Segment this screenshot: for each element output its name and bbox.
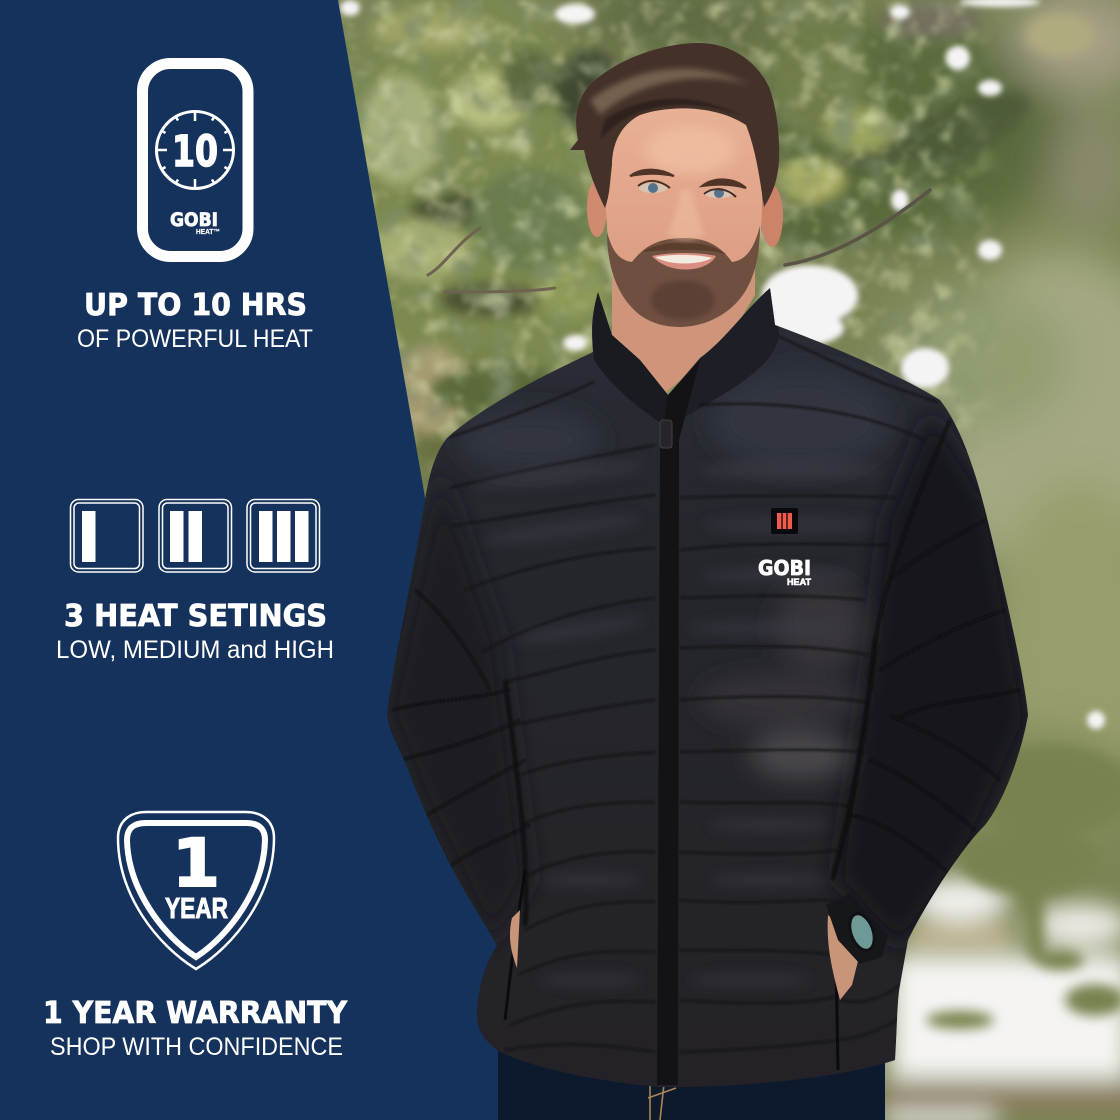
snow through tree top right bbox=[340, 0, 1105, 729]
pine needles clumps near trees bbox=[360, 2, 1095, 435]
icon: warranty shield: 1 bbox=[172, 825, 220, 902]
icon: high setting bbox=[247, 500, 320, 572]
face bbox=[605, 107, 762, 326]
subtext: of powerful heat: OF POWERFUL HEAT bbox=[77, 325, 313, 353]
moustache and chin bbox=[642, 242, 726, 254]
hair bbox=[570, 43, 779, 208]
chest seams left bbox=[450, 382, 655, 1052]
sleeve seams bbox=[392, 420, 1020, 925]
snow field bbox=[880, 878, 1120, 1120]
photo background: pine trees and snow bbox=[320, 0, 1120, 1120]
eyebrows bbox=[630, 170, 746, 188]
neck bbox=[612, 250, 755, 392]
heading: up to 10 hrs: UP TO 10 HRS bbox=[84, 288, 307, 323]
lower right branches bbox=[926, 745, 1120, 1029]
person bbox=[385, 43, 1030, 1120]
heading: 1 year warranty: 1 YEAR WARRANTY bbox=[43, 996, 348, 1031]
pocket zipper left bbox=[505, 870, 525, 1020]
sleeves shading bbox=[385, 410, 1030, 950]
icon: warranty shield bbox=[118, 812, 274, 969]
hand and watch bbox=[510, 893, 888, 1000]
cheek shading bbox=[645, 126, 735, 174]
mouth bbox=[652, 253, 716, 270]
jacket GOBI HEAT logo: GOBI bbox=[758, 556, 811, 580]
subtext: low medium high: LOW, MEDIUM and HIGH bbox=[56, 636, 334, 664]
jacket GOBI HEAT logo: HEAT bbox=[787, 577, 811, 587]
icon: medium setting bbox=[159, 500, 232, 572]
icon: phone battery with clock bbox=[142, 64, 248, 256]
feature: warranty bbox=[43, 812, 348, 1061]
jacket bbox=[385, 288, 1030, 1087]
body shading bbox=[460, 370, 890, 779]
highlights on baffles bbox=[475, 456, 880, 986]
icon: phone battery with clock: HEAT™ bbox=[196, 227, 220, 236]
collar bbox=[592, 292, 672, 425]
navy panel bbox=[0, 0, 534, 1120]
icon: phone battery with clock: GOBI bbox=[170, 209, 218, 231]
zipper pull bbox=[660, 420, 672, 448]
beard bbox=[607, 226, 760, 327]
nose bbox=[668, 190, 704, 240]
chest heat button bbox=[771, 508, 798, 534]
pocket zipper right bbox=[836, 960, 838, 1070]
subtext: shop with confidence: SHOP WITH CONFIDENCE bbox=[50, 1033, 343, 1061]
icon: low setting bbox=[70, 500, 143, 572]
chest seams right bbox=[680, 336, 938, 1052]
feature: heat settings bbox=[56, 500, 334, 664]
zipper bbox=[657, 360, 700, 1085]
branches bbox=[428, 190, 930, 292]
icon: phone battery with clock: 10 bbox=[172, 127, 218, 177]
eyes bbox=[638, 181, 736, 198]
ears bbox=[587, 179, 607, 237]
feature: battery 10 hours bbox=[77, 64, 313, 353]
jeans bbox=[498, 1040, 885, 1120]
head bbox=[570, 43, 783, 327]
heading: 3 heat setings: 3 HEAT SETINGS bbox=[64, 599, 327, 634]
icon: warranty shield: YEAR bbox=[165, 893, 228, 925]
